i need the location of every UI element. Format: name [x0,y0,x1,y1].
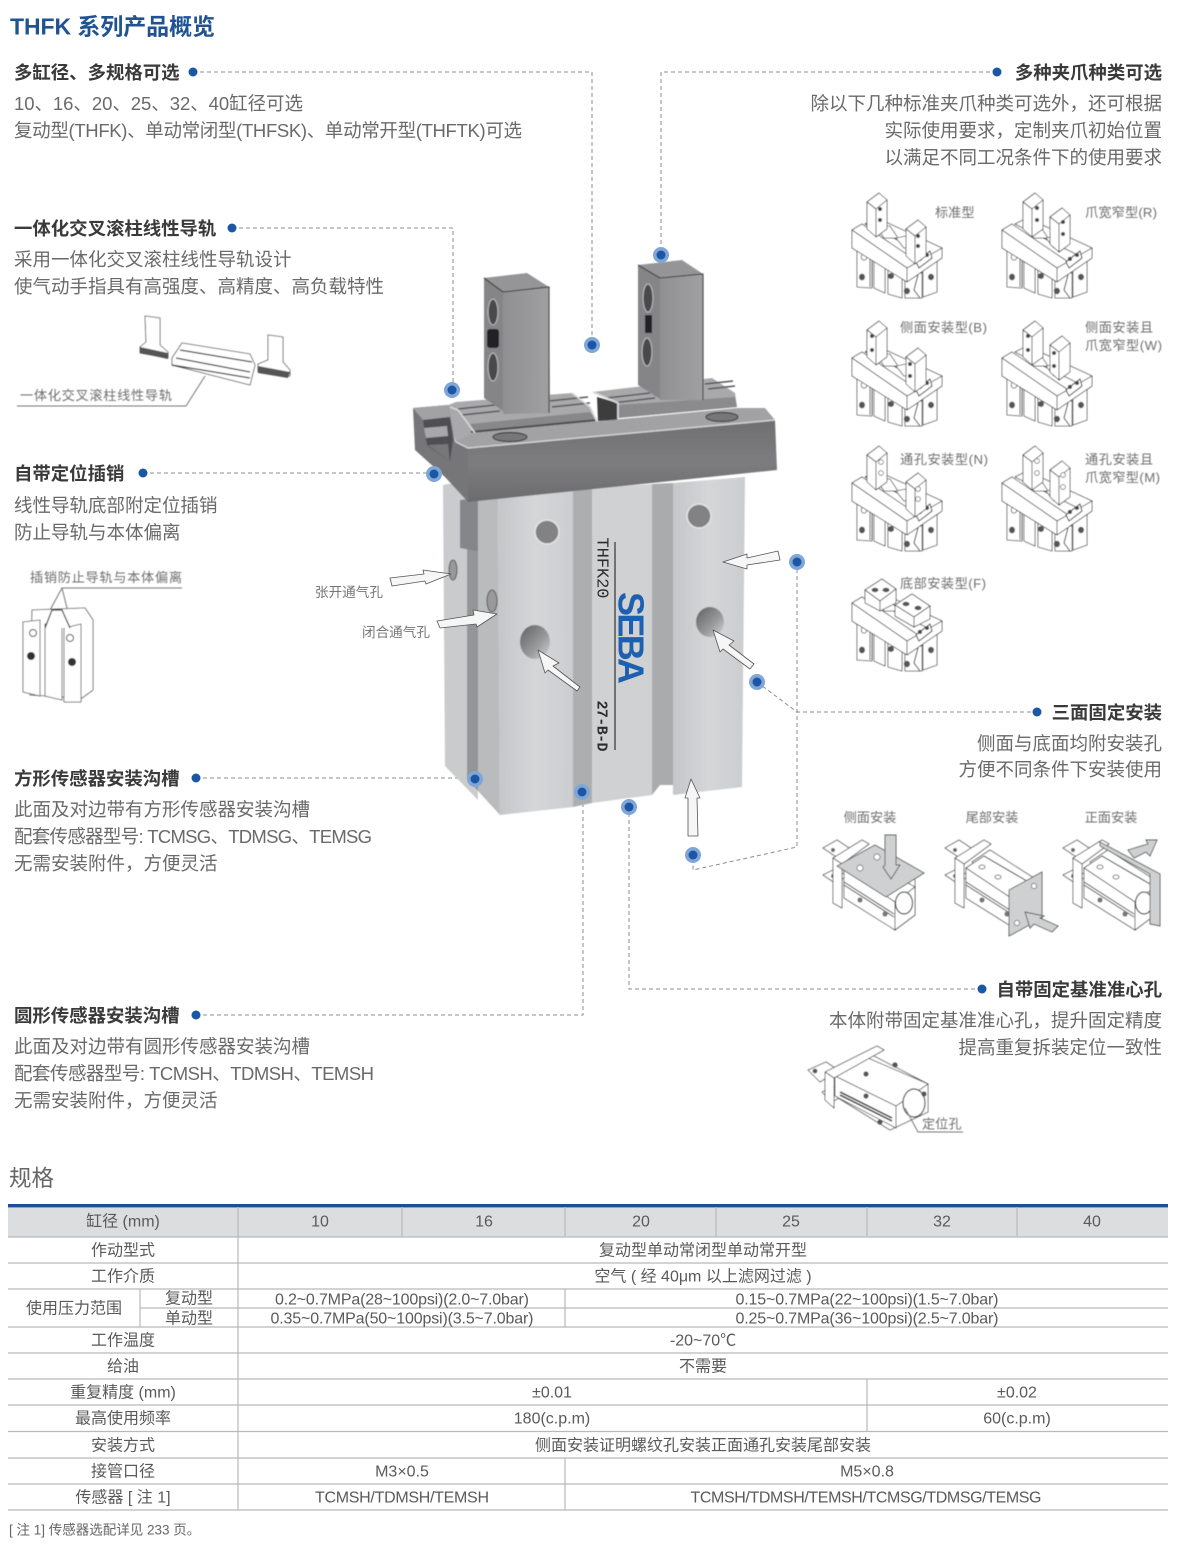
callout: integrated crossed roller guide [14,218,384,297]
jaw type: through hole narrow M [1002,446,1160,551]
spec table: 给油 [107,1358,139,1376]
callout: locating pin: 线性导轨底部附定位插销 [14,495,218,516]
spec table: 不需要 [679,1358,727,1376]
callout: jaw types: 多种夹爪种类可选 [1015,62,1162,83]
port labels: 闭合通气孔 [362,625,430,640]
callout: jaw types: 实际使用要求，定制夹爪初始位置 [884,120,1162,141]
mount: rear: 尾部安装 [966,810,1018,825]
callout: locating hole: 自带固定基准准心孔 [996,979,1163,1000]
spec table: 安装方式 [91,1436,155,1454]
callout: integrated crossed roller guide: 一体化交叉滚柱线性导轨 [14,218,217,239]
jaw type: bottom mount F: 底部安装型(F) [900,576,986,591]
port labels [315,585,430,640]
icon: locating hole gripper [808,1046,963,1132]
callout: round sensor groove: 配套传感器型号: TCMSH、TDMSH、TEMSH [14,1063,374,1084]
jaw left [484,278,503,411]
spec table: ±0.02 [997,1384,1037,1402]
callout: multi bore sizes: 多缸径、多规格可选 [14,62,180,83]
callout: jaw types: 以满足不同工况条件下的使用要求 [884,147,1162,168]
spec table: 复动型单动常闭型单动常开型 [599,1242,807,1260]
footnote: [ 注 1] 传感器选配详见 233 页。 [9,1522,200,1538]
callout: jaw types: 除以下几种标准夹爪种类可选外，还可根据 [810,93,1162,114]
icon: locating pin gripper: 插销防止导轨与本体偏离 [30,569,182,585]
jaw type: standard [852,193,975,298]
callout: locating hole [829,979,1163,1058]
jaw type: side mount B [852,320,987,426]
callout: three face mounting: 三面固定安装 [1052,702,1162,723]
callout: multi bore sizes: 10、16、20、25、32、40缸径可选 [14,93,303,114]
spec table: TCMSH/TDMSH/TEMSH/TCMSG/TDMSG/TEMSG [690,1490,1042,1506]
mount: rear [945,810,1058,936]
product markings: THFK20 [592,538,610,598]
spec table: 32 [933,1214,951,1230]
jaw right [638,265,660,399]
callout: multi bore sizes: 复动型(THFK)、单动常闭型(THFSK)、单动常开型(THFTK)可选 [14,120,522,141]
callout: integrated crossed roller guide: 采用一体化交叉滚柱线性导轨设计 [14,249,292,270]
mount: front: 正面安装 [1085,810,1137,825]
threaded holes [520,625,550,659]
spec table: -20~70℃ [670,1332,736,1350]
jaw type: through hole narrow M: 爪宽窄型(M) [1085,469,1160,485]
dashed leader lines [143,72,1037,1015]
callout: three face mounting: 侧面与底面均附安装孔 [977,733,1162,754]
jaw type: through hole N [852,446,988,551]
gap [597,397,618,421]
callout: three face mounting: 方便不同条件下安装使用 [958,759,1162,780]
spec table: 传感器 [ 注 1] [75,1488,171,1506]
port labels: 张开通气孔 [315,585,383,600]
callout: integrated crossed roller guide: 使气动手指具有高强度、高精度、高负载特性 [14,276,384,297]
spec table: 空气 ( 经 40μm 以上滤网过滤 ) [594,1268,812,1286]
spec table: 25 [782,1214,800,1230]
spec table: 0.2~0.7MPa(28~100psi)(2.0~7.0bar) [275,1292,529,1308]
screws [535,520,559,544]
base bar left end [413,405,468,502]
callout: round sensor groove: 圆形传感器安装沟槽 [14,1005,180,1026]
callout: locating hole: 提高重复拆装定位一致性 [958,1037,1162,1058]
callout: round sensor groove: 无需安装附件，方便灵活 [14,1090,218,1111]
mount: front [1063,810,1160,930]
spec table: TCMSH/TDMSH/TEMSH [315,1490,489,1506]
callout: three face mounting [958,702,1162,780]
callout: locating pin [14,463,218,543]
jaw type: through hole narrow M: 通孔安装且 [1085,452,1153,467]
spec table: 16 [475,1214,493,1230]
mount: side: 侧面安装 [844,810,896,825]
spec table: 60(c.p.m) [983,1410,1051,1428]
spec table: 工作介质 [91,1268,155,1286]
callout: locating pin: 自带定位插销 [14,463,124,484]
icon: roller guide: 一体化交叉滚柱线性导轨 [20,387,172,403]
spec table: 10 [311,1214,329,1230]
anchor points on product [426,247,805,863]
product markings [592,538,652,752]
jaw type: bottom mount F [852,576,986,671]
jaw type: side mount narrow W [1002,320,1162,426]
base bar front [468,420,777,502]
jaw type: narrow R [1002,193,1157,298]
callout: square sensor groove: 配套传感器型号: TCMSG、TDMSG、TEMSG [14,826,372,847]
rail carriage left [446,393,597,443]
product photo: pneumatic gripper [413,260,777,815]
icon: locating hole gripper: 定位孔 [922,1116,962,1132]
spec table: 复动型 [165,1290,213,1308]
spec table: 重复精度 (mm) [70,1384,176,1402]
spec table: 工作温度 [91,1332,155,1350]
jaw type: side mount narrow W: 爪宽窄型(W) [1085,337,1162,353]
spec table: ±0.01 [532,1384,572,1402]
icon: locating pin gripper [23,569,182,702]
jaw type: narrow R: 爪宽窄型(R) [1085,204,1157,220]
spec table: 最高使用频率 [75,1410,171,1428]
product markings: 27-B-D [592,700,610,752]
callout: jaw types [810,62,1162,168]
jaw type: side mount narrow W: 侧面安装且 [1085,320,1153,335]
jaw type: standard: 标准型 [935,205,975,220]
icon: roller guide [17,316,290,406]
spec table: 40 [1083,1214,1101,1230]
spec table: 接管口径 [91,1462,155,1480]
spec table: 缸径 (mm) [86,1212,160,1230]
callout: square sensor groove: 此面及对边带有方形传感器安装沟槽 [14,799,310,820]
rail carriage right [593,378,737,418]
title: THFK 系列产品概览 [10,14,215,40]
callout: square sensor groove: 方形传感器安装沟槽 [14,768,180,789]
spec table: 0.25~0.7MPa(36~100psi)(2.5~7.0bar) [736,1310,998,1328]
heading: specifications: 规格 [9,1166,54,1191]
spec table: 作动型式 [91,1242,155,1260]
arrows on product [390,551,780,836]
product markings: SEBA [610,592,652,684]
spec table: 0.35~0.7MPa(50~100psi)(3.5~7.0bar) [270,1310,534,1328]
spec table: 180(c.p.m) [514,1410,590,1428]
callout: square sensor groove [14,768,372,874]
spec table: 单动型 [165,1310,213,1328]
spec table: 使用压力范围 [26,1300,122,1318]
callout: locating hole: 本体附带固定基准准心孔，提升固定精度 [829,1010,1162,1031]
jaw type: through hole N: 通孔安装型(N) [900,452,988,467]
spec table: 0.15~0.7MPa(22~100psi)(1.5~7.0bar) [736,1292,998,1308]
body side [443,480,478,800]
spec table: 侧面安装证明螺纹孔安装正面通孔安装尾部安装 [535,1436,871,1454]
callout: round sensor groove [14,1005,374,1111]
jaw type: side mount B: 侧面安装型(B) [900,320,987,335]
callout: locating pin: 防止导轨与本体偏离 [14,522,181,543]
callout: square sensor groove: 无需安装附件，方便灵活 [14,853,218,874]
spec table: 20 [632,1214,650,1230]
spec table: M3×0.5 [375,1464,429,1480]
mount: side [823,810,924,930]
spec table [8,1204,1168,1510]
spec table: M5×0.8 [840,1464,894,1480]
base bar top surface [455,408,775,448]
callout: round sensor groove: 此面及对边带有圆形传感器安装沟槽 [14,1036,310,1057]
callout: multi bore sizes [14,62,522,141]
